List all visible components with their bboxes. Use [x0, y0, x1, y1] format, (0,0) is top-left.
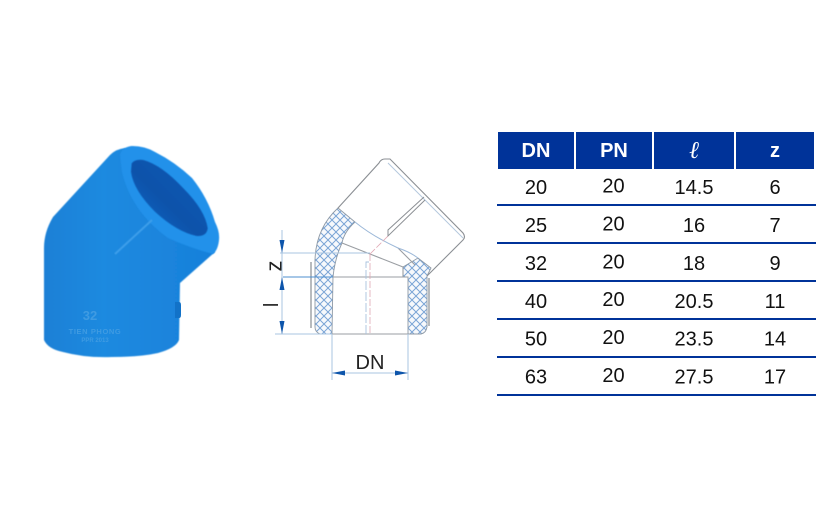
- dimension arrows: [280, 240, 408, 376]
- header l: [654, 132, 734, 169]
- row DN 20: 6: [769, 177, 781, 199]
- row DN 32: 32: [525, 253, 547, 275]
- row DN 50: 50: [525, 328, 547, 350]
- row DN 32: [497, 252, 816, 282]
- right collar: [428, 278, 430, 326]
- elbow body: [44, 148, 215, 357]
- row DN 40: 20: [602, 289, 625, 311]
- row DN 25: 7: [769, 215, 781, 237]
- hatched wall: right: [403, 258, 431, 334]
- label DN: DN: [356, 352, 384, 374]
- header row: [498, 132, 814, 169]
- row DN 25: 16: [683, 215, 705, 237]
- row DN 32: 9: [769, 253, 781, 275]
- row DN 25: 20: [602, 214, 625, 236]
- row DN 20: 20: [602, 176, 625, 198]
- row DN 40: 40: [525, 291, 547, 313]
- header l: ℓ: [689, 136, 699, 164]
- header PN: PN: [600, 140, 628, 162]
- hatched wall: left: [315, 208, 355, 334]
- label l: [263, 304, 278, 306]
- row DN 63: 17: [764, 366, 786, 388]
- row DN 63: 20: [602, 365, 625, 387]
- row DN 32: 20: [602, 252, 625, 274]
- moulded size mark: 32: [83, 308, 97, 323]
- row DN 25: [497, 214, 816, 244]
- row DN 50: 14: [764, 328, 786, 350]
- bore outline: [332, 243, 415, 334]
- header DN: [498, 132, 574, 169]
- dimensions table: [497, 132, 816, 396]
- row DN 50: 23.5: [675, 328, 713, 350]
- row DN 50: 20: [602, 327, 625, 349]
- row DN 40: [497, 289, 816, 320]
- dimension z-line highlight: [283, 276, 333, 278]
- centerlines: [370, 236, 388, 334]
- header z: z: [770, 140, 780, 162]
- moulded brand mark: TIEN PHONG: [69, 327, 121, 336]
- row DN 20: [497, 176, 816, 206]
- moulded material mark: PPR 2013: [81, 338, 109, 344]
- socket opening: [131, 160, 208, 236]
- hidden line: [366, 262, 370, 334]
- socket inner step: [388, 197, 425, 236]
- row DN 20: 14.5: [675, 177, 713, 199]
- bore curve: [355, 222, 418, 258]
- socket rim: [120, 146, 219, 254]
- row DN 63: 27.5: [675, 366, 713, 388]
- header PN: [576, 132, 652, 169]
- header DN: DN: [522, 140, 550, 162]
- product photo: blue 45 degree elbow: [44, 146, 219, 357]
- label z: z: [262, 260, 286, 272]
- row DN 25: 25: [525, 215, 547, 237]
- header z: [736, 132, 814, 169]
- row DN 63: [497, 365, 816, 396]
- socket outer parallel line: [388, 163, 463, 238]
- technical cross-section drawing: [262, 159, 464, 380]
- row DN 32: 18: [683, 253, 705, 275]
- left collar: [310, 262, 312, 328]
- angled socket outline: [338, 159, 464, 276]
- row DN 63: 63: [525, 366, 547, 388]
- row DN 20: 20: [525, 177, 547, 199]
- alignment ridge: [115, 220, 152, 254]
- row DN 50: [497, 327, 816, 358]
- row DN 40: 20.5: [675, 291, 713, 313]
- dimension lines: [275, 230, 408, 380]
- row DN 40: 11: [765, 291, 785, 313]
- side nub: [175, 302, 181, 318]
